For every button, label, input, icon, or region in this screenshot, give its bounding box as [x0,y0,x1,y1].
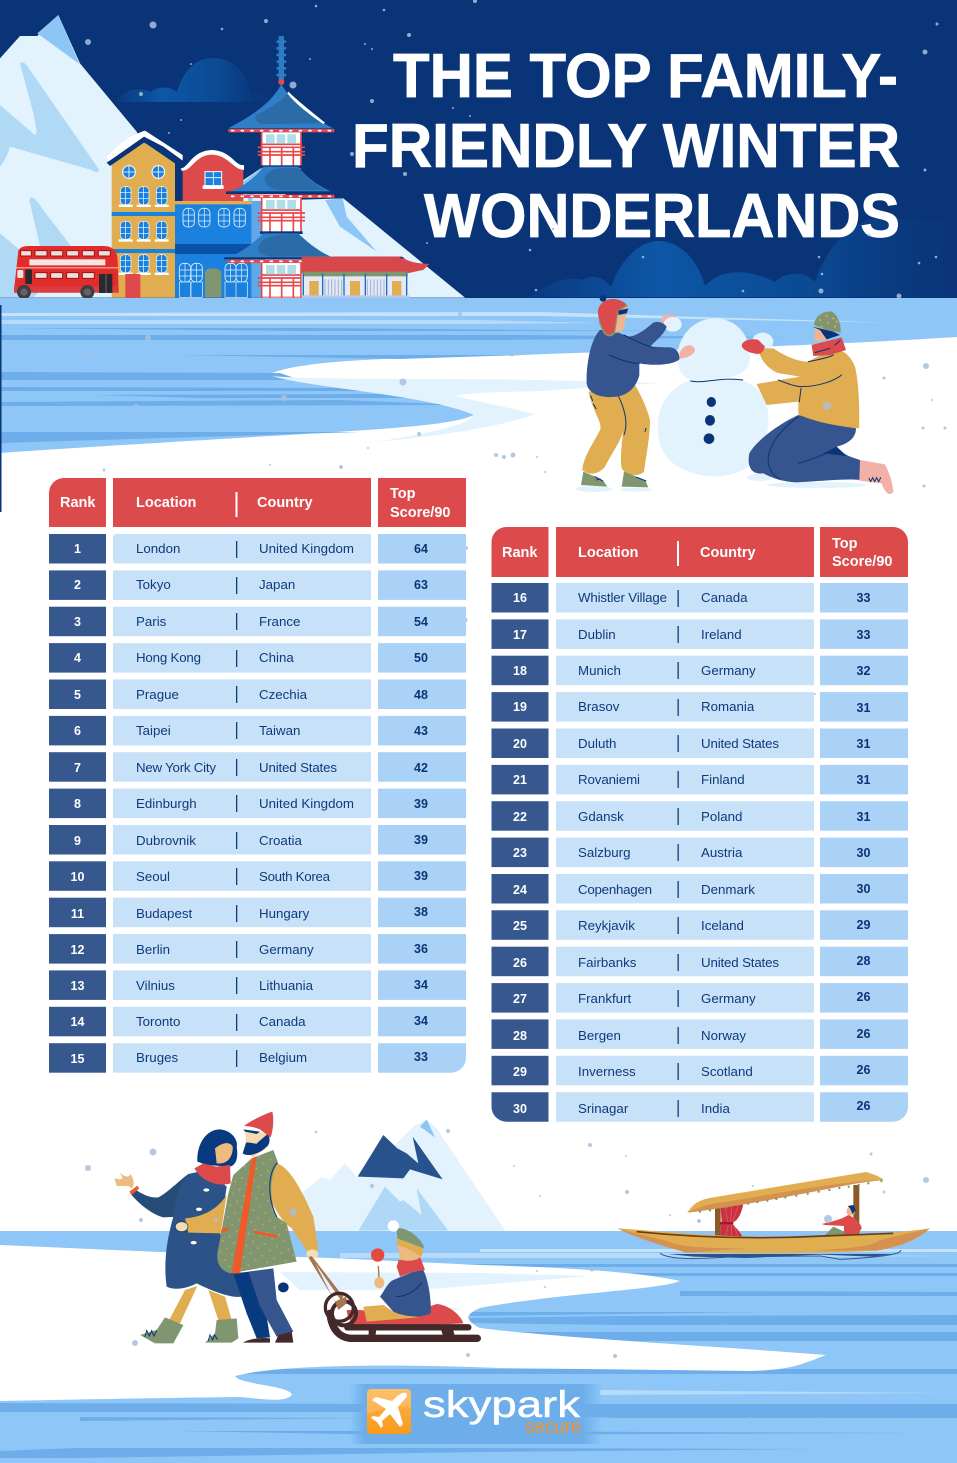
row 27: Frankfurt [578,991,632,1006]
yellow townhouse [107,131,183,298]
row 29: Scotland [701,1064,753,1079]
table header: Rank [502,545,538,561]
row 23: Austria [701,845,743,860]
row 1: 1 [74,542,81,556]
row 19: Romania [701,699,755,714]
table header: Score/90 [832,554,892,570]
man [217,1112,318,1343]
row 15: Belgium [259,1050,307,1065]
row 23: 30 [857,846,870,860]
title: FRIENDLY WINTER [352,112,900,181]
sled with child [308,1220,477,1338]
table header: Top [390,486,416,502]
row 23: 23 [513,846,527,860]
row 27: Germany [701,991,756,1006]
row 9: Dubrovnik [136,833,196,848]
row 16: 16 [513,591,527,605]
row 29 [492,1056,908,1085]
row 4: China [259,650,294,665]
row 15: Bruges [136,1050,178,1065]
row 15 [49,1043,466,1073]
row 2: Japan [259,577,295,592]
row 29: Inverness [578,1064,636,1079]
row 14: Canada [259,1014,306,1029]
title [352,42,900,251]
row 21: 21 [513,773,527,787]
row 4: 4 [74,651,81,665]
row 2: 2 [74,578,81,592]
row 2 [49,570,466,600]
row 20: Duluth [578,736,616,751]
icon: orange plane badge [367,1389,411,1434]
row 18: 18 [513,664,527,678]
illustration: family with sled [114,1112,477,1343]
row 11: 11 [71,907,84,921]
row 7 [49,752,466,782]
row 30: Srinagar [578,1101,629,1116]
row 6 [49,716,466,745]
row 17 [492,619,908,649]
row 19: 31 [857,701,870,715]
row 20: United States [701,736,779,751]
row 1 [49,534,466,564]
row 23: Salzburg [578,845,630,860]
row 18: 32 [857,664,870,678]
row 6: Taiwan [259,723,300,738]
logo: skypark secure: secure [525,1417,581,1438]
table header: Country [700,545,756,561]
table header: Country [257,495,313,511]
ground shadows [576,474,866,492]
row 18: Munich [578,663,621,678]
row 11: Hungary [259,906,310,921]
row 26: 28 [857,954,870,968]
bottom lake and snow [0,1231,957,1463]
row 22 [492,801,908,831]
row 27: 27 [513,992,527,1006]
row 21: Rovaniemi [578,772,640,787]
row 28: 26 [857,1027,870,1041]
illustration: shikara boat [617,1172,930,1259]
row 11: Budapest [136,906,192,921]
row 20: 20 [513,737,527,751]
row 4 [49,643,466,673]
row 6: 6 [74,724,81,738]
table: ranks 1 to 15 [49,478,466,1073]
row 13: 13 [71,979,84,993]
row 3: 3 [74,615,81,629]
background: sky clouds [116,58,957,297]
table header: Top [832,536,858,552]
row 30 [492,1092,908,1122]
row 12: Germany [259,942,314,957]
row 22: 22 [513,810,527,824]
row 25: Iceland [701,918,744,933]
row 3: France [259,614,300,629]
row 30: 30 [513,1102,527,1116]
row 10: Seoul [136,869,170,884]
row 17: 33 [857,628,870,642]
row 8: 39 [414,797,428,811]
title: THE TOP FAMILY- [393,42,898,111]
row 17: 17 [513,628,527,642]
row 13: 34 [414,978,428,992]
row 1: London [136,541,180,556]
illustration: city buildings [14,36,429,299]
red double-decker bus [14,246,119,299]
row 10: South Korea [259,869,331,884]
row 19: Brasov [578,699,620,714]
row 25 [492,910,908,940]
row 28 [492,1019,908,1049]
logo: skypark secure [350,1384,602,1444]
row 8 [49,789,466,818]
navy snowball [278,1282,289,1292]
row 20 [492,728,908,758]
row 17: Dublin [578,627,616,642]
row 8: 8 [74,797,81,811]
title: WONDERLANDS [424,182,900,251]
row 3: 54 [414,615,428,629]
row 12: 12 [71,943,84,957]
row 21: Finland [701,772,745,787]
row 24: 24 [513,883,527,897]
row 13 [49,970,466,1000]
row 10 [49,861,466,891]
row 9: 9 [74,834,81,848]
row 25: Reykjavik [578,918,635,933]
row 5: 5 [74,688,81,702]
pagoda tower [224,36,337,299]
row 9: 39 [414,833,428,847]
row 28: Norway [701,1028,746,1043]
row 4: 50 [414,651,428,665]
row 24: Denmark [701,882,755,897]
row 18: Germany [701,663,756,678]
row 10: 39 [414,869,428,883]
adult in green hat [742,312,893,494]
row 12 [49,934,466,964]
row 2: 63 [414,578,428,592]
row 10: 10 [71,870,84,884]
row 26: Fairbanks [578,955,637,970]
low red-roof palace [302,257,429,298]
row 16: Whistler Village [578,590,667,605]
row 16: 33 [857,591,870,605]
row 5: Prague [136,687,179,702]
row 13: Lithuania [259,978,314,993]
logo: skypark secure: skypark [423,1384,581,1425]
row 11: 38 [414,905,428,919]
row 26: United States [701,955,779,970]
row 25: 25 [513,919,527,933]
row 2: Tokyo [136,577,171,592]
row 3 [49,607,466,636]
table: ranks 16 to 30 [492,527,908,1122]
row 8: Edinburgh [136,796,197,811]
row 6: Taipei [136,723,171,738]
row 20: 31 [857,737,870,751]
row 23 [492,838,908,867]
row 14 [49,1007,466,1036]
row 1: United Kingdom [259,541,354,556]
illustration: children building snowman [576,295,893,494]
table header [492,527,908,577]
background: night sky [0,0,957,298]
row 29: 26 [857,1063,870,1077]
row 11 [49,898,466,927]
row 27 [492,983,908,1013]
row 22: Gdansk [578,809,624,824]
row 24: Copenhagen [578,882,652,897]
row 7: United States [259,760,337,775]
row 21: 31 [857,773,870,787]
row 17: Ireland [701,627,742,642]
row 9: Croatia [259,833,302,848]
row 24: 30 [857,882,870,896]
row 4: Hong Kong [136,650,201,665]
top frozen lake [0,298,957,512]
row 14: Toronto [136,1014,180,1029]
row 28: 28 [513,1029,527,1043]
row 12: 36 [414,942,428,956]
illustration: mountains behind family [302,1119,505,1231]
row 14: 34 [414,1014,428,1028]
table header: Score/90 [390,505,450,521]
row 7: 7 [74,761,81,775]
row 5: 48 [414,688,428,702]
row 18 [492,656,908,685]
table header: Location [136,495,196,511]
row 5: Czechia [259,687,308,702]
row 8: United Kingdom [259,796,354,811]
child in red hat [581,295,695,487]
woman [114,1129,242,1343]
row 26 [492,947,908,976]
row 26: 26 [513,956,527,970]
row 25: 29 [857,918,870,932]
row 24 [492,874,908,904]
row 27: 26 [857,990,870,1004]
row 3: Paris [136,614,167,629]
row 21 [492,765,908,794]
row 15: 33 [414,1050,428,1064]
row 7: New York City [136,760,216,775]
row 28: Bergen [578,1028,621,1043]
table header [49,478,466,527]
row 1: 64 [414,542,428,556]
table header: Rank [60,495,96,511]
snowman [658,318,773,476]
row 7: 42 [414,761,428,775]
row 13: Vilnius [136,978,175,993]
blue and red building [175,150,265,298]
row 19 [492,692,908,722]
row 30: 26 [857,1099,870,1113]
row 22: 31 [857,810,870,824]
row 29: 29 [513,1065,527,1079]
row 6: 43 [414,724,428,738]
row 19: 19 [513,700,527,714]
row 16 [492,583,908,612]
row 9 [49,825,466,854]
row 16: Canada [701,590,748,605]
row 30: India [701,1101,730,1116]
row 22: Poland [701,809,742,824]
row 12: Berlin [136,942,170,957]
row 14: 14 [71,1015,84,1029]
illustration: snowy mountains [0,15,465,298]
row 15: 15 [71,1052,84,1066]
table header: Location [578,545,638,561]
row 5 [49,680,466,709]
